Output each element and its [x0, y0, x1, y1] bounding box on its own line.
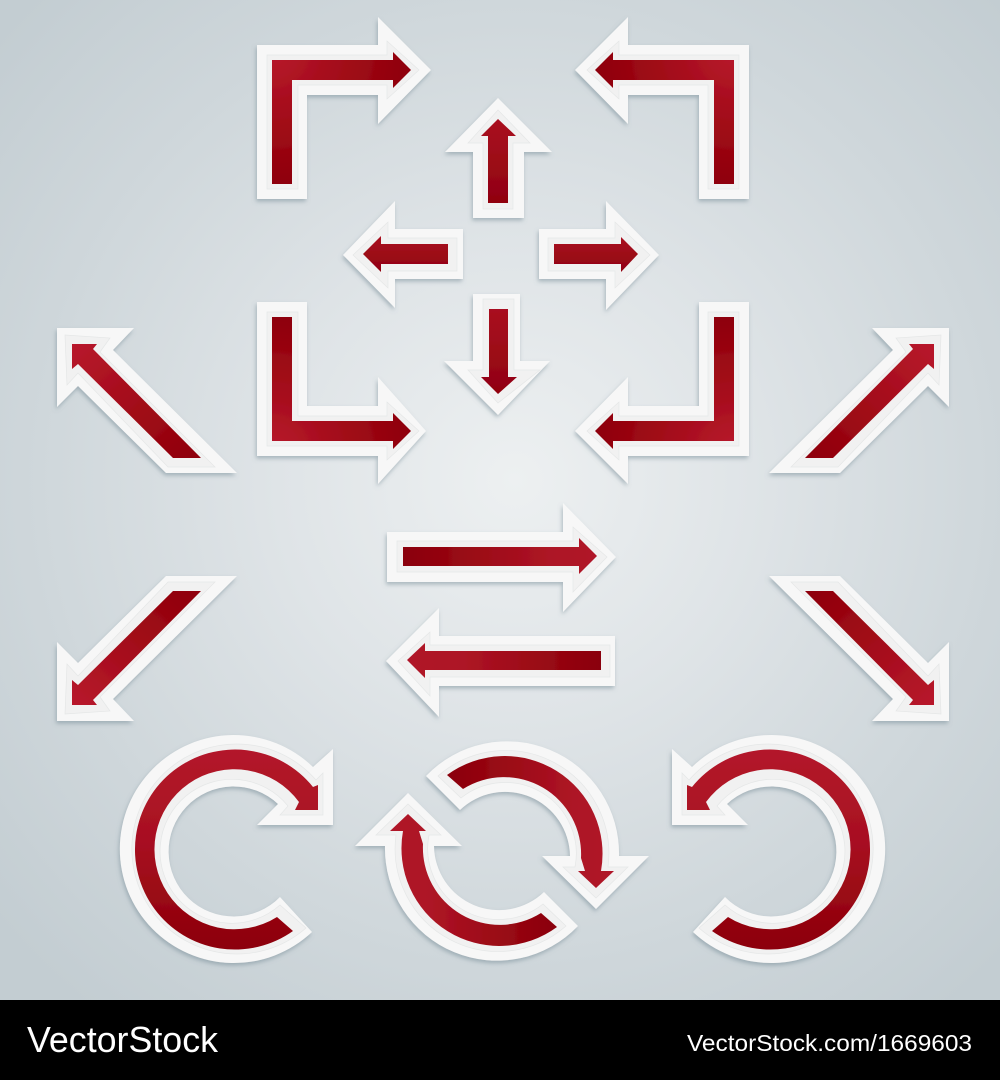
arrow: small left	[343, 201, 463, 308]
arrow: diagonal bottom-left	[57, 576, 237, 721]
arrow: diagonal top-left	[57, 328, 237, 473]
arrow: cycle lower arc	[355, 793, 578, 961]
arrow: long left	[386, 608, 615, 717]
arrow: diagonal bottom-right	[769, 576, 949, 721]
arrow: diagonal top-right	[769, 328, 949, 473]
arrow: cycle upper arc	[426, 741, 649, 909]
arrow: bent bottom-right pointing left	[575, 302, 749, 484]
arrow: bent bottom-left pointing right	[257, 302, 426, 484]
logo text: VectorStock	[27, 1019, 219, 1060]
footer bar	[0, 1000, 1000, 1080]
arrow: bent top-left pointing right	[257, 17, 431, 199]
arrow: small down	[444, 294, 550, 415]
arrow: bent top-right pointing left	[575, 17, 749, 199]
arrow: long right	[387, 503, 616, 612]
arrow: circular counter-clockwise right	[672, 735, 885, 963]
arrow: circular clockwise left	[120, 735, 333, 963]
arrow: small up	[445, 98, 552, 218]
image id text: VectorStock.com/1669603	[687, 1030, 972, 1056]
arrow: small right	[539, 201, 659, 310]
